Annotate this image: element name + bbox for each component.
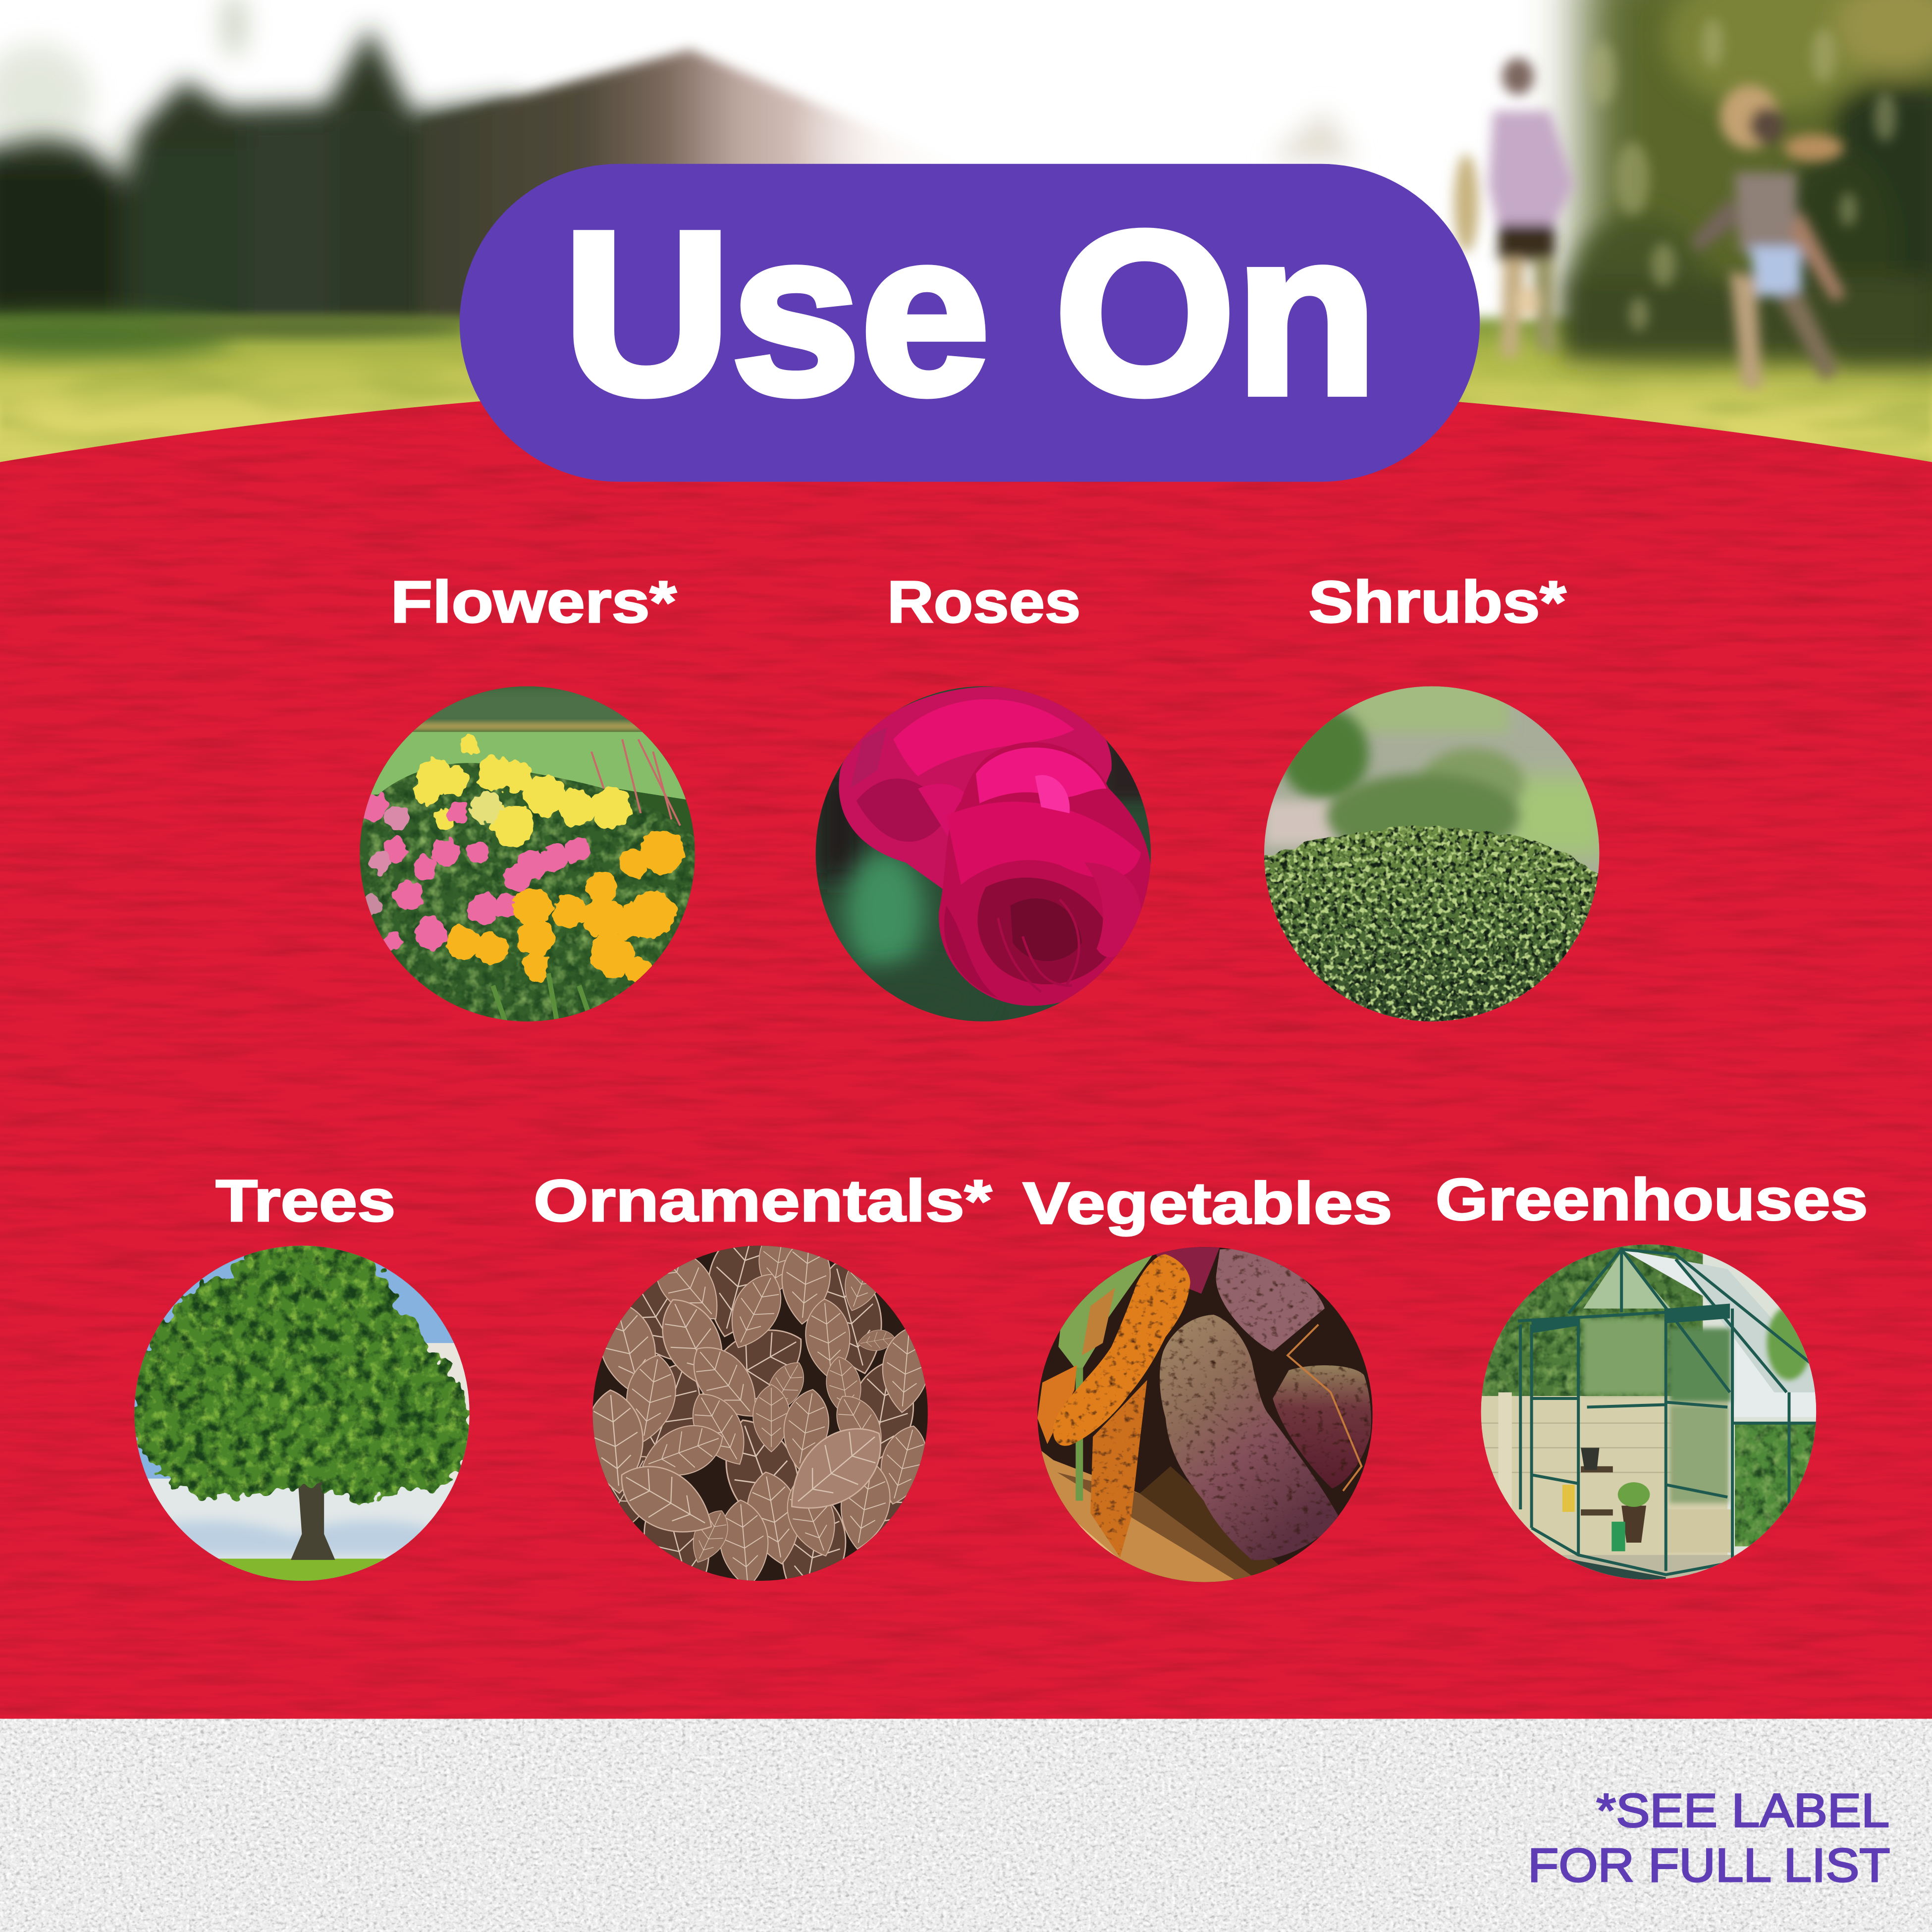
label: Vegetables: Vegetables	[1022, 1171, 1393, 1236]
child left	[1454, 58, 1575, 357]
title text: Use On	[563, 184, 1378, 442]
photo circle: flowers	[359, 686, 695, 1021]
light leaves	[582, 1220, 935, 1590]
label: Roses: Roses	[887, 569, 1080, 635]
label: Greenhouses: Greenhouses	[1436, 1167, 1868, 1233]
trunk	[291, 1466, 335, 1560]
bokeh highlights	[1587, 18, 1896, 331]
right trees	[1583, 0, 1932, 351]
wood box	[1037, 1448, 1263, 1582]
background photo: blurred garden scene	[0, 0, 1932, 493]
glass roof highlight	[1621, 1249, 1816, 1417]
photo circle: ornamentals leaves	[577, 1219, 943, 1614]
grey textured footer panel	[0, 1719, 1932, 1932]
upper rose	[839, 687, 1112, 893]
label: Flowers: Flowers*	[390, 569, 677, 635]
frame	[1518, 1249, 1816, 1575]
shelf and pots	[1581, 1466, 1613, 1472]
photo circle: greenhouse	[1481, 1244, 1816, 1596]
faint sky haze and distant foliage	[0, 0, 246, 179]
carrots	[1037, 1365, 1077, 1444]
sun glow	[789, 0, 1208, 290]
lower rose	[939, 742, 1152, 1006]
lawn	[0, 318, 1932, 490]
label: Shrubs: Shrubs*	[1308, 569, 1566, 635]
greens	[1059, 1247, 1158, 1374]
interior plants	[1583, 1318, 1667, 1395]
footnote text: FOR FULL LIST	[1528, 1839, 1890, 1892]
dark under-layer of leaves	[577, 1219, 943, 1614]
label: Ornamentals: Ornamentals*	[534, 1168, 992, 1234]
title pill: Use On	[460, 164, 1480, 482]
child right	[1690, 85, 1846, 388]
foliage behind	[1481, 1244, 1703, 1398]
footnote text	[1528, 1784, 1890, 1892]
red wood panel with curved top	[0, 381, 1932, 1719]
photo circle: tree	[132, 1237, 481, 1583]
photo circle: vegetables	[1037, 1247, 1373, 1590]
fence	[1481, 1396, 1727, 1568]
footnote text: *SEE LABEL	[1596, 1784, 1889, 1837]
photo circle: roses	[816, 686, 1152, 1030]
distant trees left	[0, 27, 518, 351]
photo circle: shrubs	[1264, 678, 1608, 1035]
beets	[1160, 1249, 1371, 1560]
house	[419, 49, 961, 351]
label: Trees: Trees	[215, 1168, 395, 1234]
canopy	[132, 1237, 472, 1503]
